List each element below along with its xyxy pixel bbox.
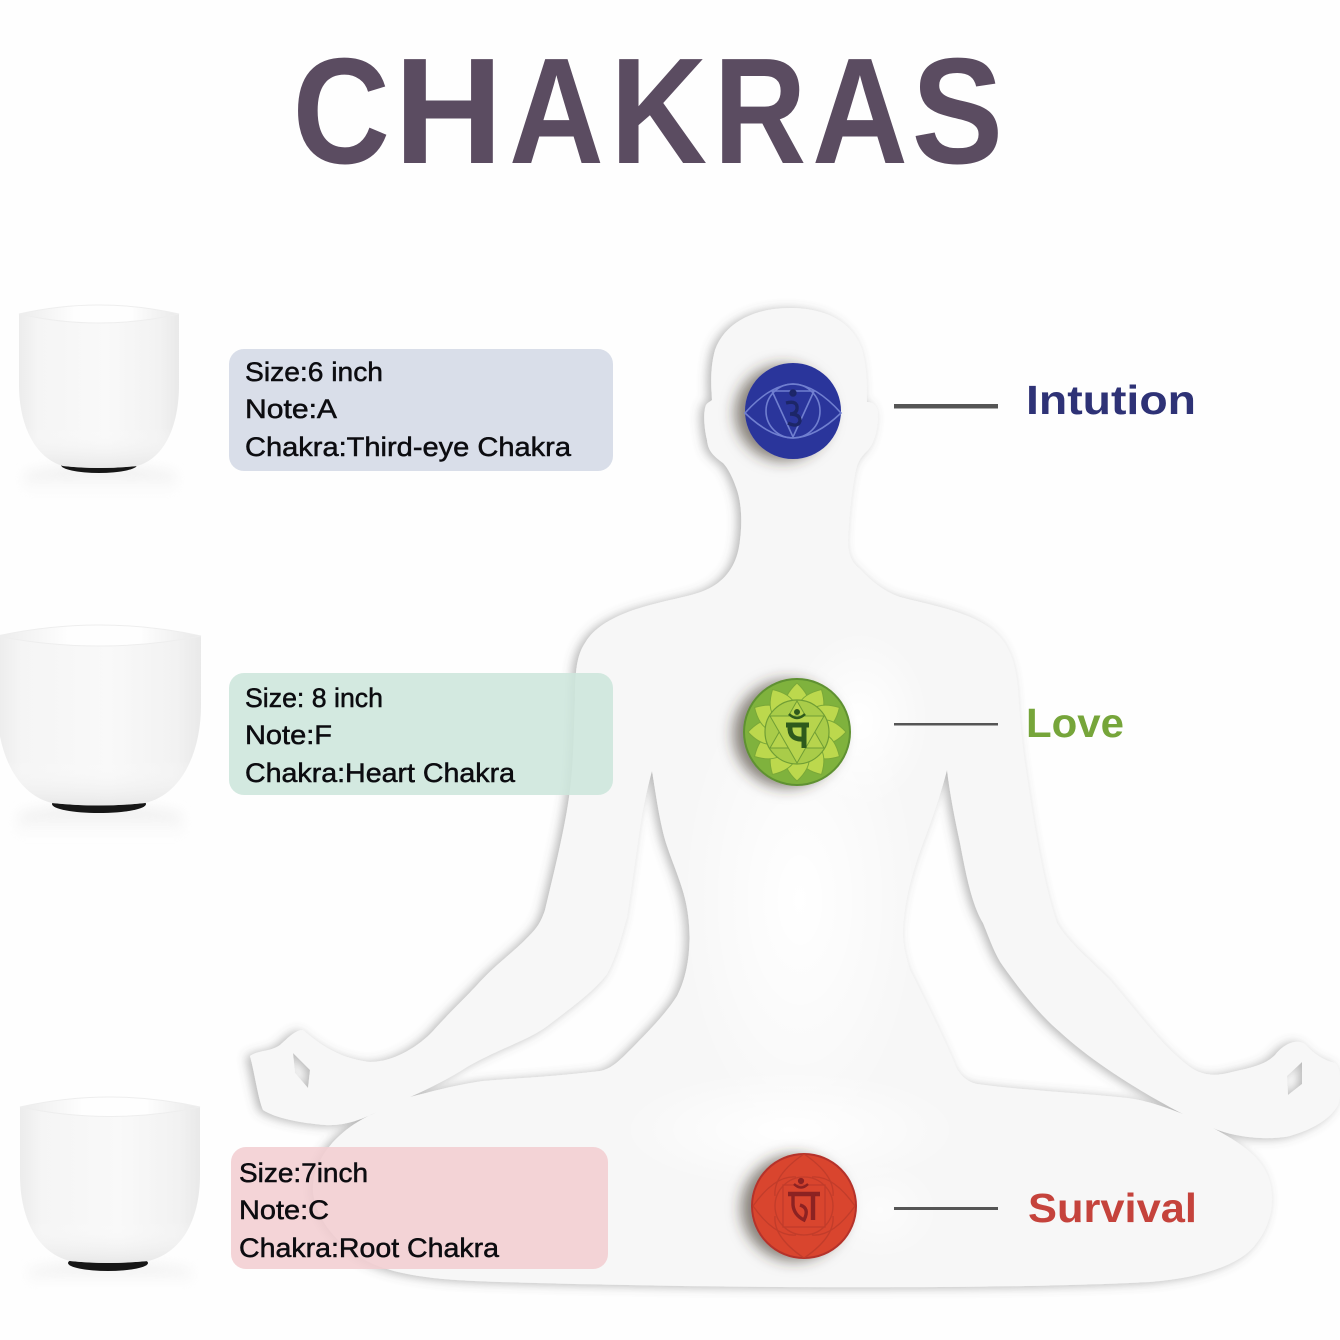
crystal bowl: 8 inch <box>0 625 201 845</box>
info text: root: Size:7inch <box>239 1158 368 1188</box>
label: Love: Love <box>1026 700 1124 746</box>
info text: heart <box>245 683 516 788</box>
info text: third-eye <box>245 357 572 462</box>
title: C <box>292 26 390 195</box>
title: H <box>394 26 503 195</box>
info panel: heart chakra <box>229 673 613 795</box>
connector line: love <box>894 723 998 726</box>
info panel: root chakra <box>231 1147 608 1269</box>
label: Intution: Intution <box>1026 377 1196 423</box>
title: S <box>912 26 1003 195</box>
label: Survival: Survival <box>1028 1185 1197 1231</box>
third-eye chakra disc <box>745 363 841 459</box>
connector line: survival <box>894 1207 998 1210</box>
title <box>292 26 1003 195</box>
root chakra disc <box>751 1153 857 1259</box>
title: R <box>714 26 806 195</box>
crystal bowl: 7 inch <box>20 1097 200 1290</box>
info text: third-eye: Chakra:Third-eye Chakra <box>245 432 572 462</box>
info text: root <box>239 1158 500 1263</box>
info text: third-eye: Size:6 inch <box>245 357 383 387</box>
title: A <box>509 26 604 195</box>
info text: heart: Size: 8 inch <box>245 683 383 713</box>
meditating body silhouette <box>250 308 1340 1287</box>
info text: heart: Note:F <box>245 720 332 750</box>
info panel: third-eye chakra <box>229 349 613 471</box>
info text: root: Chakra:Root Chakra <box>239 1233 500 1263</box>
connector line: intuition <box>894 404 998 408</box>
info text: third-eye: Note:A <box>245 394 337 424</box>
heart chakra disc <box>743 678 851 786</box>
crystal bowl: 6 inch <box>19 305 180 500</box>
info text: root: Note:C <box>239 1195 329 1225</box>
title: K <box>610 26 707 195</box>
info text: heart: Chakra:Heart Chakra <box>245 758 516 788</box>
title: A <box>812 26 908 195</box>
